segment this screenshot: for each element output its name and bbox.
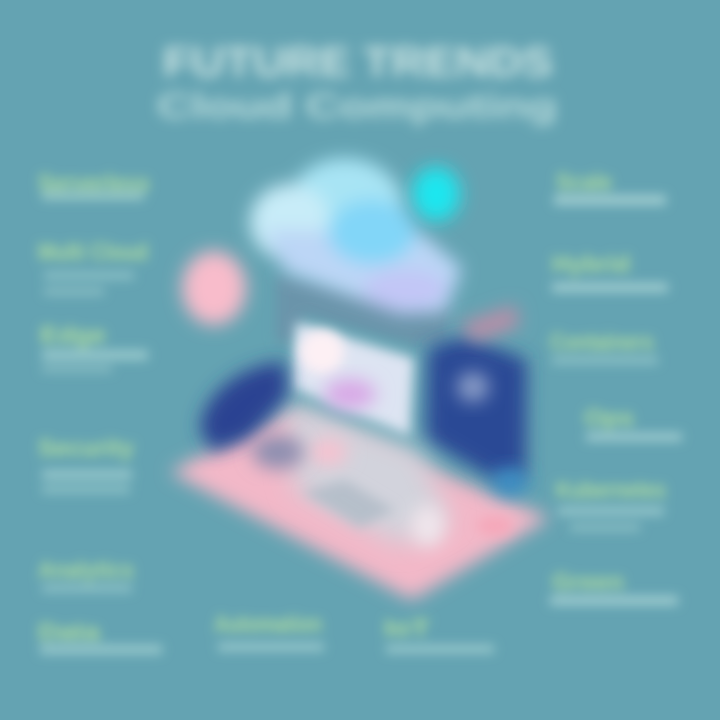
laptop screen [292, 322, 414, 436]
gray device [252, 435, 304, 469]
server highlight [457, 372, 489, 402]
icon: pink bubble [182, 251, 246, 325]
blue corner [492, 468, 528, 496]
label 13 [556, 477, 666, 531]
label 11 [550, 329, 658, 364]
label 2 [38, 239, 148, 295]
left labels [38, 170, 162, 654]
title: FUTURE TRENDS [163, 38, 553, 85]
label 12 [584, 405, 682, 441]
label 7: Automation [214, 611, 322, 638]
label 3 [40, 322, 148, 372]
right labels [550, 169, 682, 605]
keyboard [302, 480, 395, 528]
pink tip [477, 516, 513, 536]
label 11: Containers [550, 329, 654, 356]
label 4 [38, 435, 135, 493]
white cube [411, 505, 445, 547]
label 1: Serverless [38, 170, 150, 197]
label 8 [384, 615, 494, 653]
title [157, 38, 557, 126]
keyboard area [285, 400, 450, 545]
label 8: IoT [384, 615, 430, 642]
connector band [276, 275, 450, 345]
label 2: Multi Cloud [38, 239, 148, 266]
label 14 [550, 569, 678, 605]
label 10: Hybrid [552, 251, 630, 278]
label 7 [214, 611, 324, 651]
pink arrow [458, 305, 520, 342]
label 5: Analytics [38, 557, 134, 584]
label 6: Data [38, 619, 101, 646]
dark mouse shape [200, 362, 288, 452]
label 12: Ops [584, 405, 634, 432]
label 10 [552, 251, 668, 292]
label 14: Green [552, 569, 624, 596]
label 9 [554, 169, 666, 205]
label 6 [38, 619, 162, 654]
icon: cyan circle [412, 167, 460, 221]
title: Cloud Computing [157, 87, 557, 126]
icon: cloud [250, 158, 462, 314]
pink patch [308, 438, 348, 466]
label 4: Security [38, 435, 135, 462]
dark server [426, 336, 527, 480]
label 3: Edge [40, 322, 106, 349]
screen accent [324, 379, 376, 409]
label 9: Scale [556, 169, 612, 196]
screen white glow [300, 330, 344, 374]
label 13: Kubernetes [556, 477, 666, 504]
laptop base [170, 410, 550, 600]
illustration: cloud and laptop [170, 158, 550, 600]
bottom labels [214, 611, 494, 653]
